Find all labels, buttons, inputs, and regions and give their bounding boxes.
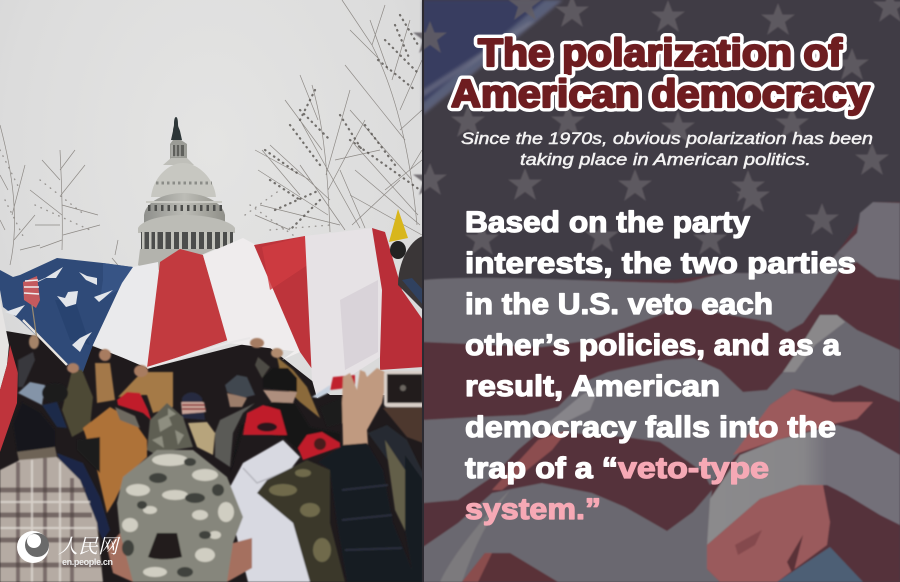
crowd: white hoodie xyxy=(230,440,310,582)
body text: interests, the two parties xyxy=(465,247,856,280)
panel: photo of the Capitol and crowd with flag xyxy=(0,0,425,582)
photo: blue flag canton with stars xyxy=(0,258,133,372)
crowd: camo hood xyxy=(147,403,193,453)
panel: flag background xyxy=(413,0,900,582)
crowd: red hats xyxy=(117,392,340,460)
crowd: brown jacket xyxy=(83,407,147,513)
title: American democracy xyxy=(451,73,870,116)
subtitle: Since the 1970s, obvious polarization has been xyxy=(461,129,873,148)
body text: democracy falls into the xyxy=(465,411,836,444)
background: flag stars xyxy=(413,0,900,255)
title: The polarization of xyxy=(478,32,843,75)
background: waving red and white stripes xyxy=(423,202,900,582)
crowd: background people and hats xyxy=(18,368,423,582)
highlighted phrase xyxy=(465,452,769,526)
photo: crowd xyxy=(0,335,425,582)
photo: bare trees xyxy=(0,0,422,270)
title xyxy=(451,32,870,116)
crowd: camo cap in the foreground xyxy=(107,450,252,582)
subtitle: taking place in American politics. xyxy=(520,150,811,169)
crowd: raised hand xyxy=(342,368,387,445)
crowd: raised arms and hands xyxy=(18,335,320,437)
highlighted phrase: system.” xyxy=(465,493,601,526)
crowd: backpack strap xyxy=(77,437,100,473)
body text: result, American xyxy=(465,370,720,403)
body text xyxy=(465,206,856,526)
photo: large red and white flag stripes xyxy=(93,228,423,398)
photo: dark area under the flag xyxy=(0,330,423,582)
title: The polarization of xyxy=(478,32,843,75)
crowd: plaid shirt xyxy=(0,457,103,582)
body text: trap of a “ xyxy=(465,452,618,485)
subtitle xyxy=(461,129,873,169)
crowd: black puffer jacket xyxy=(318,443,417,582)
crowd: phone xyxy=(384,371,425,407)
logo: Chinese wordmark: 人民网 xyxy=(58,536,121,558)
body text: in the U.S. veto each xyxy=(465,288,773,321)
photo: Capitol dome xyxy=(138,117,235,270)
background: blue flag corner xyxy=(423,0,563,115)
logo: crescent emblem xyxy=(17,531,49,563)
photo: yellow flag and people in back right xyxy=(389,209,423,310)
title: American democracy xyxy=(451,73,870,116)
logo: site address: en.people.cn xyxy=(62,557,113,567)
highlighted phrase: veto-type xyxy=(618,452,769,485)
photo: left red flag edge xyxy=(0,300,18,452)
body text: other’s policies, and as a xyxy=(465,329,840,362)
crowd: camo jacket xyxy=(257,460,345,582)
crowd: blue jacket and beanie xyxy=(13,402,110,540)
body text: Based on the party xyxy=(465,206,750,239)
logo: People's Daily Online xyxy=(17,531,121,567)
